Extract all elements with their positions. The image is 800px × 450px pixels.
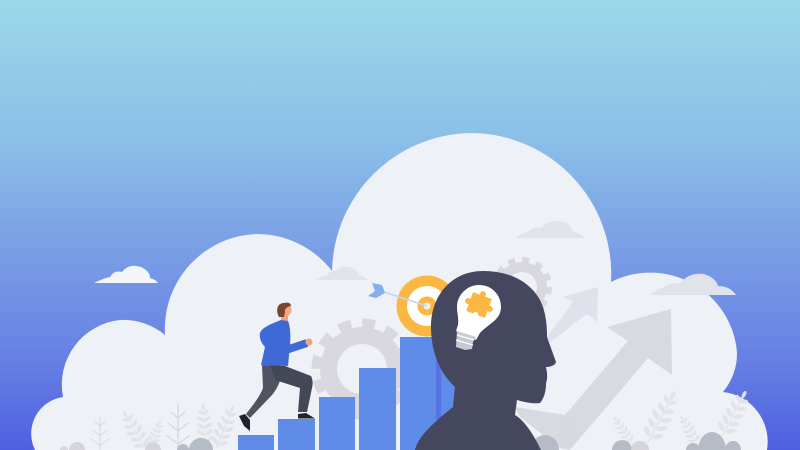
small cloud right	[650, 274, 736, 295]
plant: fern	[194, 403, 215, 447]
torso	[260, 320, 290, 366]
neck	[281, 314, 288, 323]
bar chart	[238, 337, 456, 450]
hair	[277, 303, 291, 317]
plant: short fern	[675, 412, 703, 447]
arm	[286, 343, 307, 350]
back leg	[246, 365, 283, 418]
large gear	[317, 324, 407, 414]
small cloud centre	[315, 267, 368, 280]
plant: left fern	[115, 406, 154, 450]
dart	[368, 283, 427, 306]
growth arrow: back	[547, 287, 598, 350]
person	[239, 303, 315, 431]
plant: centre twig	[166, 404, 190, 450]
front leg	[270, 365, 313, 412]
light bulb	[456, 285, 501, 350]
front shoe	[298, 413, 315, 418]
bushes	[60, 432, 741, 450]
growth arrow: front	[515, 309, 672, 450]
small gear	[495, 260, 549, 314]
plant: tall fern	[637, 386, 686, 448]
plant: left twig	[91, 416, 109, 450]
small cloud left	[94, 266, 158, 283]
head silhouette	[415, 271, 556, 450]
plant: right fern	[608, 413, 638, 448]
plant: left small fern	[144, 418, 167, 450]
plants behind figure	[91, 386, 755, 450]
target	[396, 276, 458, 336]
puzzle piece	[461, 286, 498, 322]
large cloud	[31, 133, 768, 450]
small cloud top right	[516, 221, 584, 238]
back shoe	[239, 414, 250, 431]
paper sheet	[517, 315, 627, 415]
plant: far right fern	[713, 386, 755, 441]
plant: middle twig	[558, 413, 578, 450]
bulb base	[456, 331, 476, 350]
face	[278, 304, 292, 316]
plant: fern slanted	[207, 401, 243, 450]
hand	[306, 338, 312, 346]
